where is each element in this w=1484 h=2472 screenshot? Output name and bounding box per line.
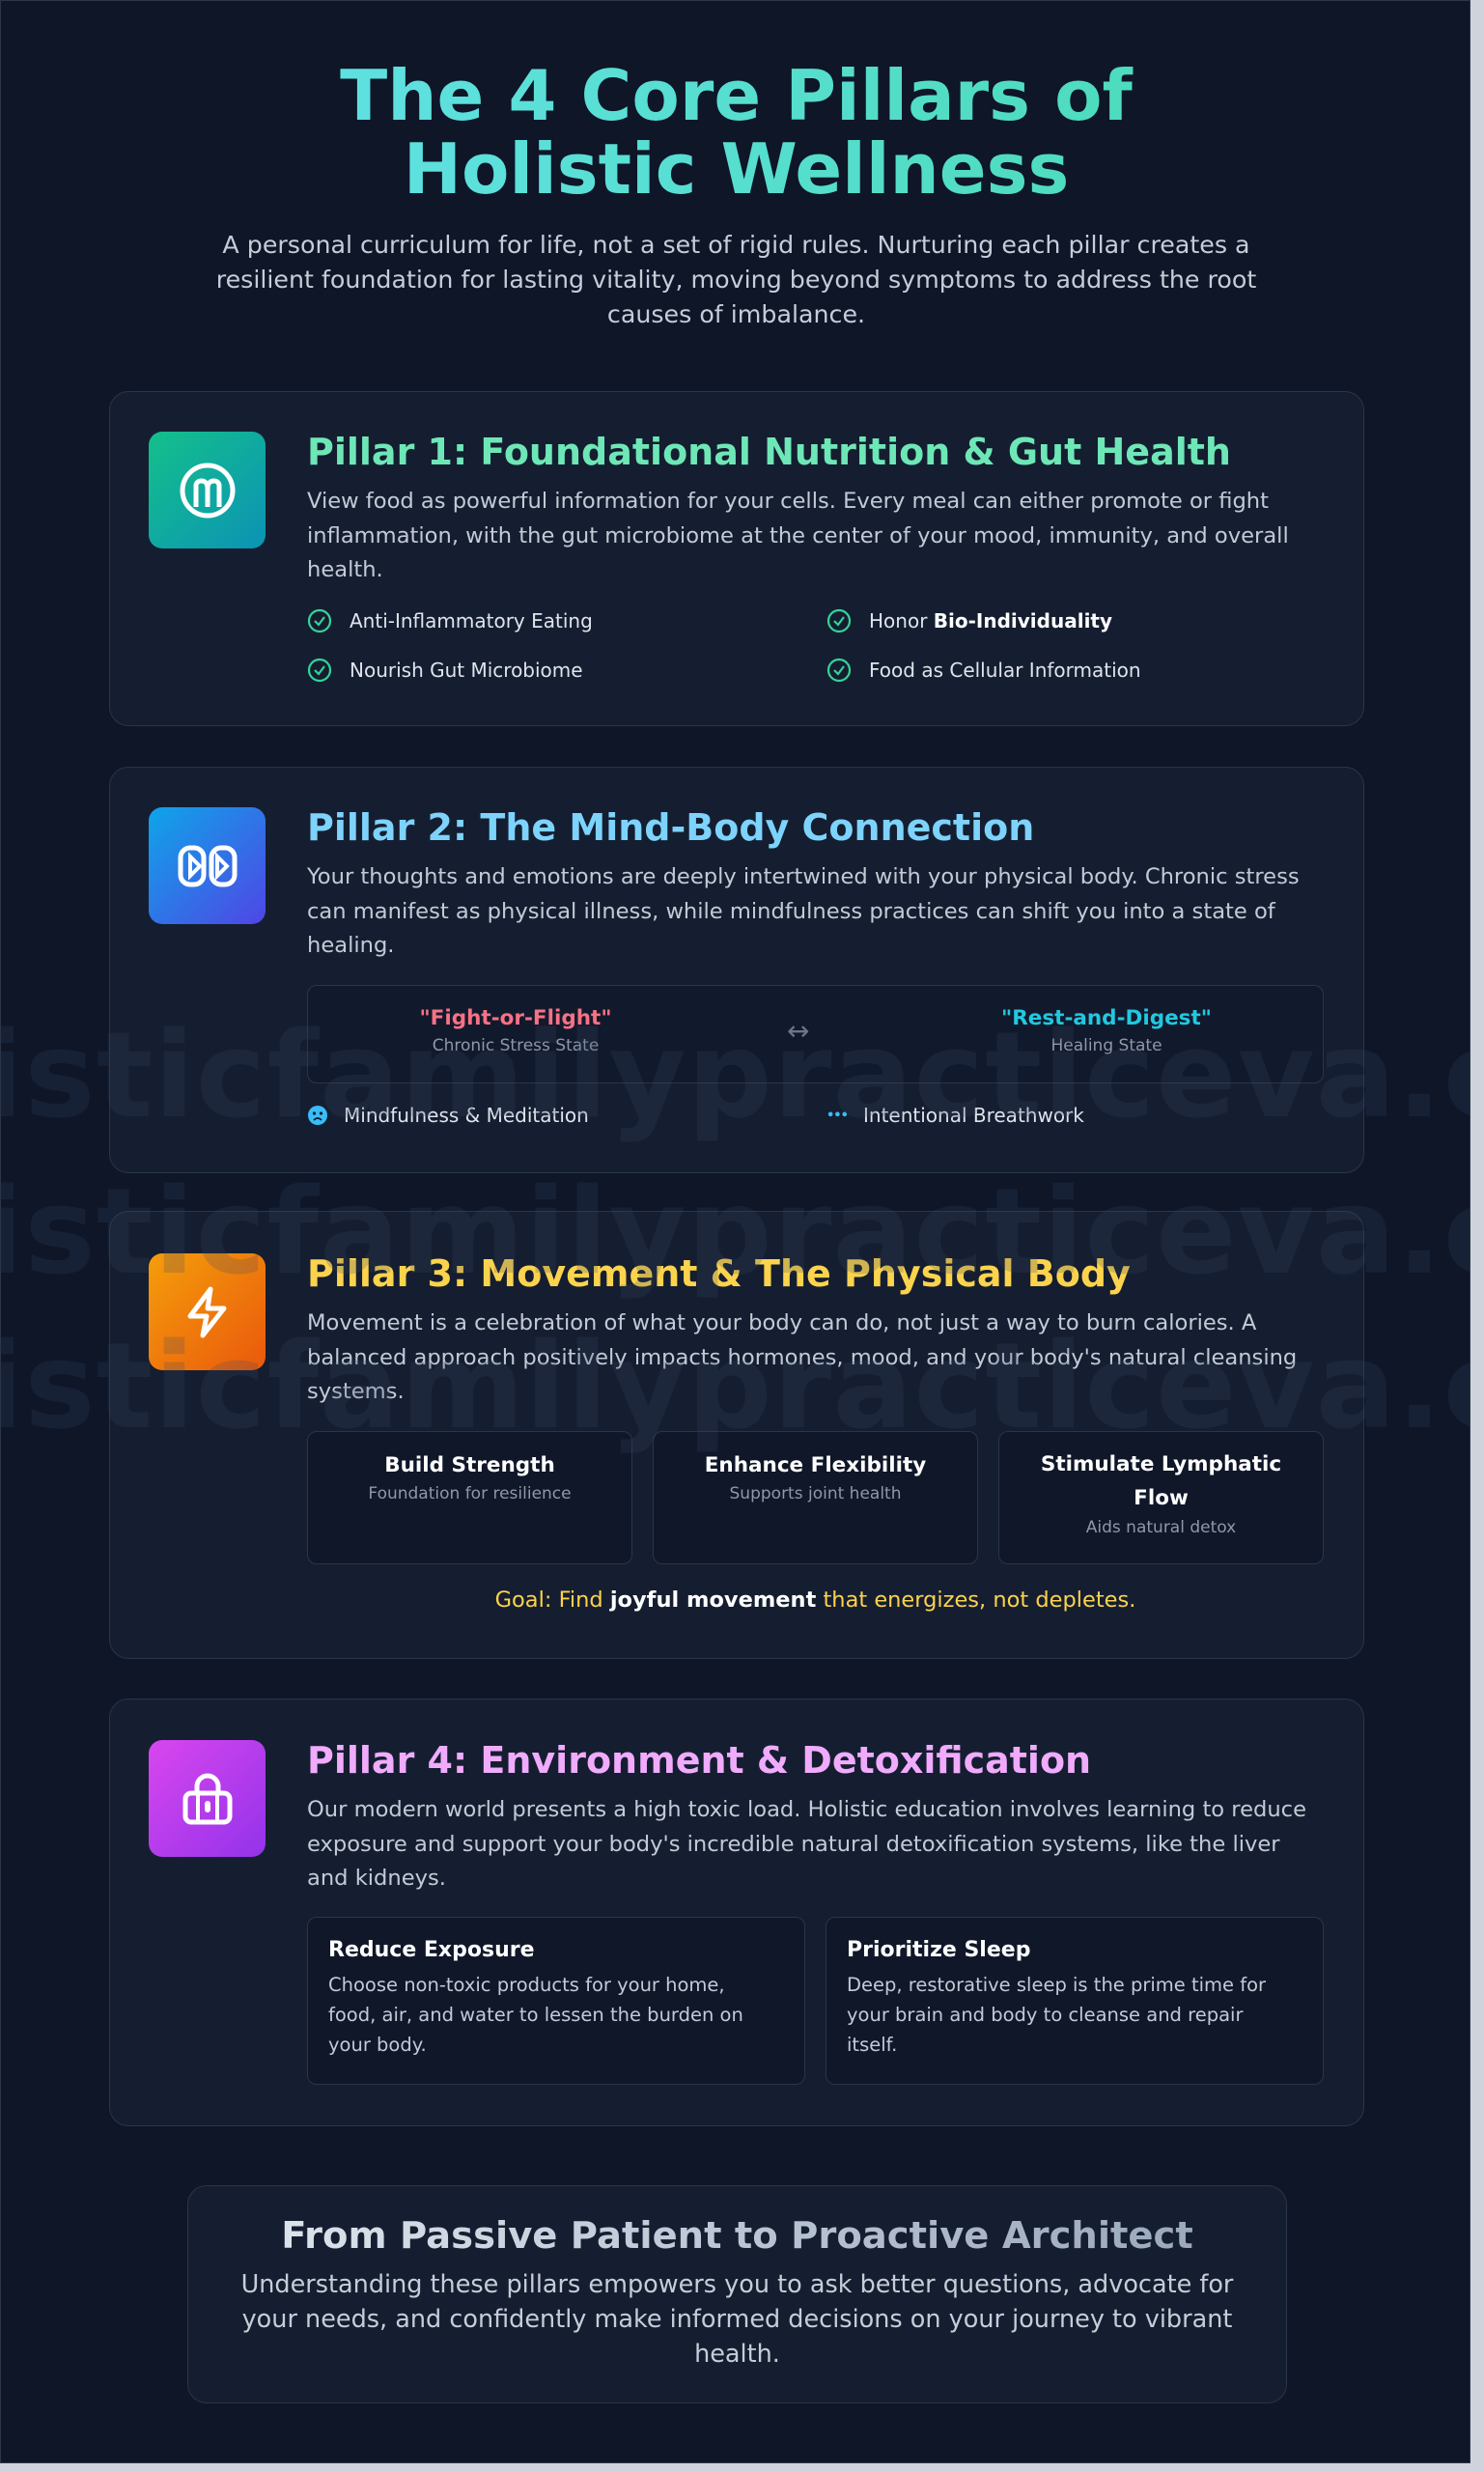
callout heading: From Passive Patient to Proactive Architect: [281, 2214, 1193, 2258]
panel: pillar 4: [109, 1699, 1364, 2126]
title: Holistic Wellness: [404, 128, 1069, 210]
description: exposure and support your body's incredible natural detoxification systems, like the liver: [307, 1831, 1280, 1856]
heading: Pillar 2: The Mind-Body Connection: [307, 806, 1034, 849]
box: prioritize sleep: [826, 1917, 1324, 2085]
callout text: your needs, and confidently make informed decisions on your journey to vibrant: [242, 2305, 1232, 2334]
callout: conclusion: [187, 2185, 1287, 2403]
icon: mind-body: [149, 807, 266, 924]
box: lymphatic: Stimulate Lymphatic: [1041, 1452, 1281, 1476]
box: prioritize sleep: Deep, restorative sleep is the prime time for: [847, 1974, 1266, 1996]
box: prioritize sleep: Prioritize Sleep: [847, 1938, 1030, 1962]
bullet list: [307, 608, 1141, 682]
description: and kidneys.: [307, 1866, 446, 1891]
description: systems.: [307, 1379, 405, 1404]
box: lymphatic: Flow: [1134, 1486, 1189, 1510]
icon: nutrition: [149, 432, 266, 548]
description: [307, 864, 1300, 958]
description: health.: [307, 557, 383, 582]
subtitle: resilient foundation for lasting vitality, moving beyond symptoms to address the root: [216, 266, 1256, 294]
bullet: Food as Cellular Information: [869, 659, 1141, 682]
bullet: Anti-Inflammatory Eating: [350, 609, 593, 632]
fight-or-flight: Chronic Stress State: [433, 1036, 599, 1055]
rest-and-digest: [1001, 1006, 1212, 1055]
box: flexibility: Supports joint health: [730, 1484, 901, 1503]
description: [307, 1310, 1297, 1404]
goal line: Goal: Find joyful movement that energizes, not depletes.: [495, 1587, 1135, 1613]
callout text: [241, 2270, 1234, 2369]
box: reduce exposure: Choose non-toxic products for your home,: [328, 1974, 725, 1996]
heading: Pillar 4: Environment & Detoxification: [307, 1739, 1091, 1782]
icon: lightning: [149, 1253, 266, 1370]
bullet: Honor Bio-Individuality: [869, 609, 1112, 632]
icon: lock: [149, 1740, 266, 1857]
heading: Pillar 3: Movement & The Physical Body: [307, 1252, 1131, 1295]
fight-or-flight: [419, 1006, 612, 1055]
arrow: ↔: [787, 1015, 809, 1047]
panel: pillar 1: [109, 391, 1364, 726]
fight-or-flight: "Fight-or-Flight": [419, 1006, 612, 1030]
box: reduce exposure: your body.: [328, 2034, 427, 2056]
box: lymphatic: Aids natural detox: [1086, 1518, 1236, 1537]
box: reduce exposure: Reduce Exposure: [328, 1938, 535, 1962]
description: View food as powerful information for your cells. Every meal can either promote or fight: [307, 489, 1269, 514]
subtitle: causes of imbalance.: [607, 300, 865, 328]
description: can manifest as physical illness, while mindfulness practices can shift you into a state of: [307, 898, 1275, 923]
description: Your thoughts and emotions are deeply intertwined with your physical body. Chronic stress: [307, 864, 1300, 889]
box: flexibility: Enhance Flexibility: [705, 1453, 926, 1477]
box: lymphatic: [998, 1431, 1324, 1564]
subtitle: [216, 231, 1256, 328]
rest-and-digest: "Rest-and-Digest": [1001, 1006, 1212, 1030]
description: [307, 1797, 1306, 1891]
box: prioritize sleep: itself.: [847, 2034, 897, 2056]
box: reduce exposure: [307, 1917, 805, 2085]
rest-and-digest: Healing State: [1050, 1036, 1162, 1055]
bullet: Nourish Gut Microbiome: [350, 659, 583, 682]
description: Movement is a celebration of what your body can do, not just a way to burn calories. A: [307, 1310, 1256, 1335]
box: strength: Build Strength: [384, 1453, 555, 1477]
box: flexibility: [653, 1431, 978, 1564]
description: healing.: [307, 933, 394, 958]
heading: Pillar 1: Foundational Nutrition & Gut Health: [307, 431, 1231, 473]
description: balanced approach positively impacts hormones, mood, and your body's natural cleansing: [307, 1344, 1297, 1369]
callout text: Understanding these pillars empowers you to ask better questions, advocate for: [241, 2270, 1233, 2299]
title: The 4 Core Pillars of: [340, 55, 1133, 136]
subtitle: A personal curriculum for life, not a set of rigid rules. Nurturing each pillar creates a: [222, 231, 1250, 259]
practice items: [308, 1104, 1084, 1127]
callout text: health.: [694, 2340, 780, 2369]
description: [307, 489, 1289, 582]
item: breathwork: Intentional Breathwork: [863, 1104, 1084, 1127]
box: strength: [307, 1431, 632, 1564]
box: strength: Foundation for resilience: [368, 1484, 572, 1503]
item: breathwork: •••: [826, 1109, 848, 1122]
description: inflammation, with the gut microbiome at the center of your mood, immunity, and overall: [307, 523, 1289, 548]
panel: pillar 3: [109, 1211, 1364, 1659]
panel: pillar 2: [109, 767, 1364, 1173]
description: Our modern world presents a high toxic load. Holistic education involves learning to reduce: [307, 1797, 1306, 1822]
box: reduce exposure: food, air, and water to lessen the burden on: [328, 2004, 743, 2026]
item: meditation: Mindfulness & Meditation: [344, 1104, 589, 1127]
box: prioritize sleep: your brain and body to cleanse and repair: [847, 2004, 1243, 2026]
title: [1, 59, 1471, 206]
comparison box: [307, 985, 1324, 1083]
